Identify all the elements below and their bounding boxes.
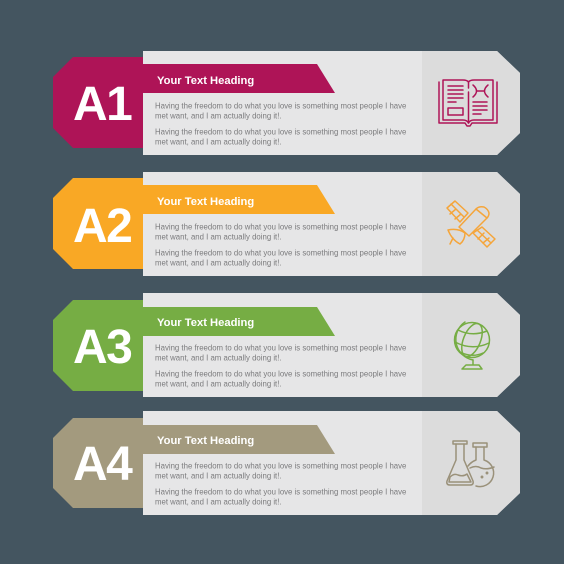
text block: A2: met want, and I am actually doing it!. [155,232,282,242]
text block: A3 [155,344,406,388]
panel: A1 [53,51,520,155]
label: A3: A3 [73,321,131,374]
label: A4: A4 [73,438,133,491]
icon: globe [454,321,490,369]
text block: A1: Having the freedom to do what you love is something most people I have [155,128,406,136]
text block: A3: Having the freedom to do what you love is something most people I have [155,370,406,378]
text block: A2 [155,222,406,268]
panel: A4 [53,411,520,515]
icon: satellite [447,201,495,247]
heading: A3: Your Text Heading [157,317,254,329]
text block: A2: met want, and I am actually doing it!. [155,258,282,268]
text block: A3: Having the freedom to do what you love is something most people I have [155,344,406,352]
text block: A2: Having the freedom to do what you love is something most people I have [155,222,406,232]
text block: A4: met want, and I am actually doing it!. [155,498,282,506]
heading: A2: Your Text Heading [157,196,254,208]
heading: A1: Your Text Heading [157,75,254,87]
text block: A1: Having the freedom to do what you love is something most people I have [155,102,406,110]
text block: A4: Having the freedom to do what you love is something most people I have [155,488,406,496]
icon: flasks [447,441,494,487]
heading: A4: Your Text Heading [157,435,254,447]
panel: A2 [53,172,520,276]
text block: A1: met want, and I am actually doing it!. [155,112,282,120]
text block: A1: met want, and I am actually doing it!. [155,138,282,146]
text block: A4: Having the freedom to do what you love is something most people I have [155,462,406,470]
text block: A3: met want, and I am actually doing it!. [155,380,282,388]
icon: open book [439,80,497,126]
text block: A4: met want, and I am actually doing it!. [155,472,282,480]
text block: A2: Having the freedom to do what you love is something most people I have [155,248,406,258]
text block: A3: met want, and I am actually doing it!. [155,354,282,362]
text block: A4 [155,462,406,506]
label: A2: A2 [73,200,131,253]
panel: A3 [53,293,520,397]
label: A1: A1 [73,78,132,131]
text block: A1 [155,102,406,146]
